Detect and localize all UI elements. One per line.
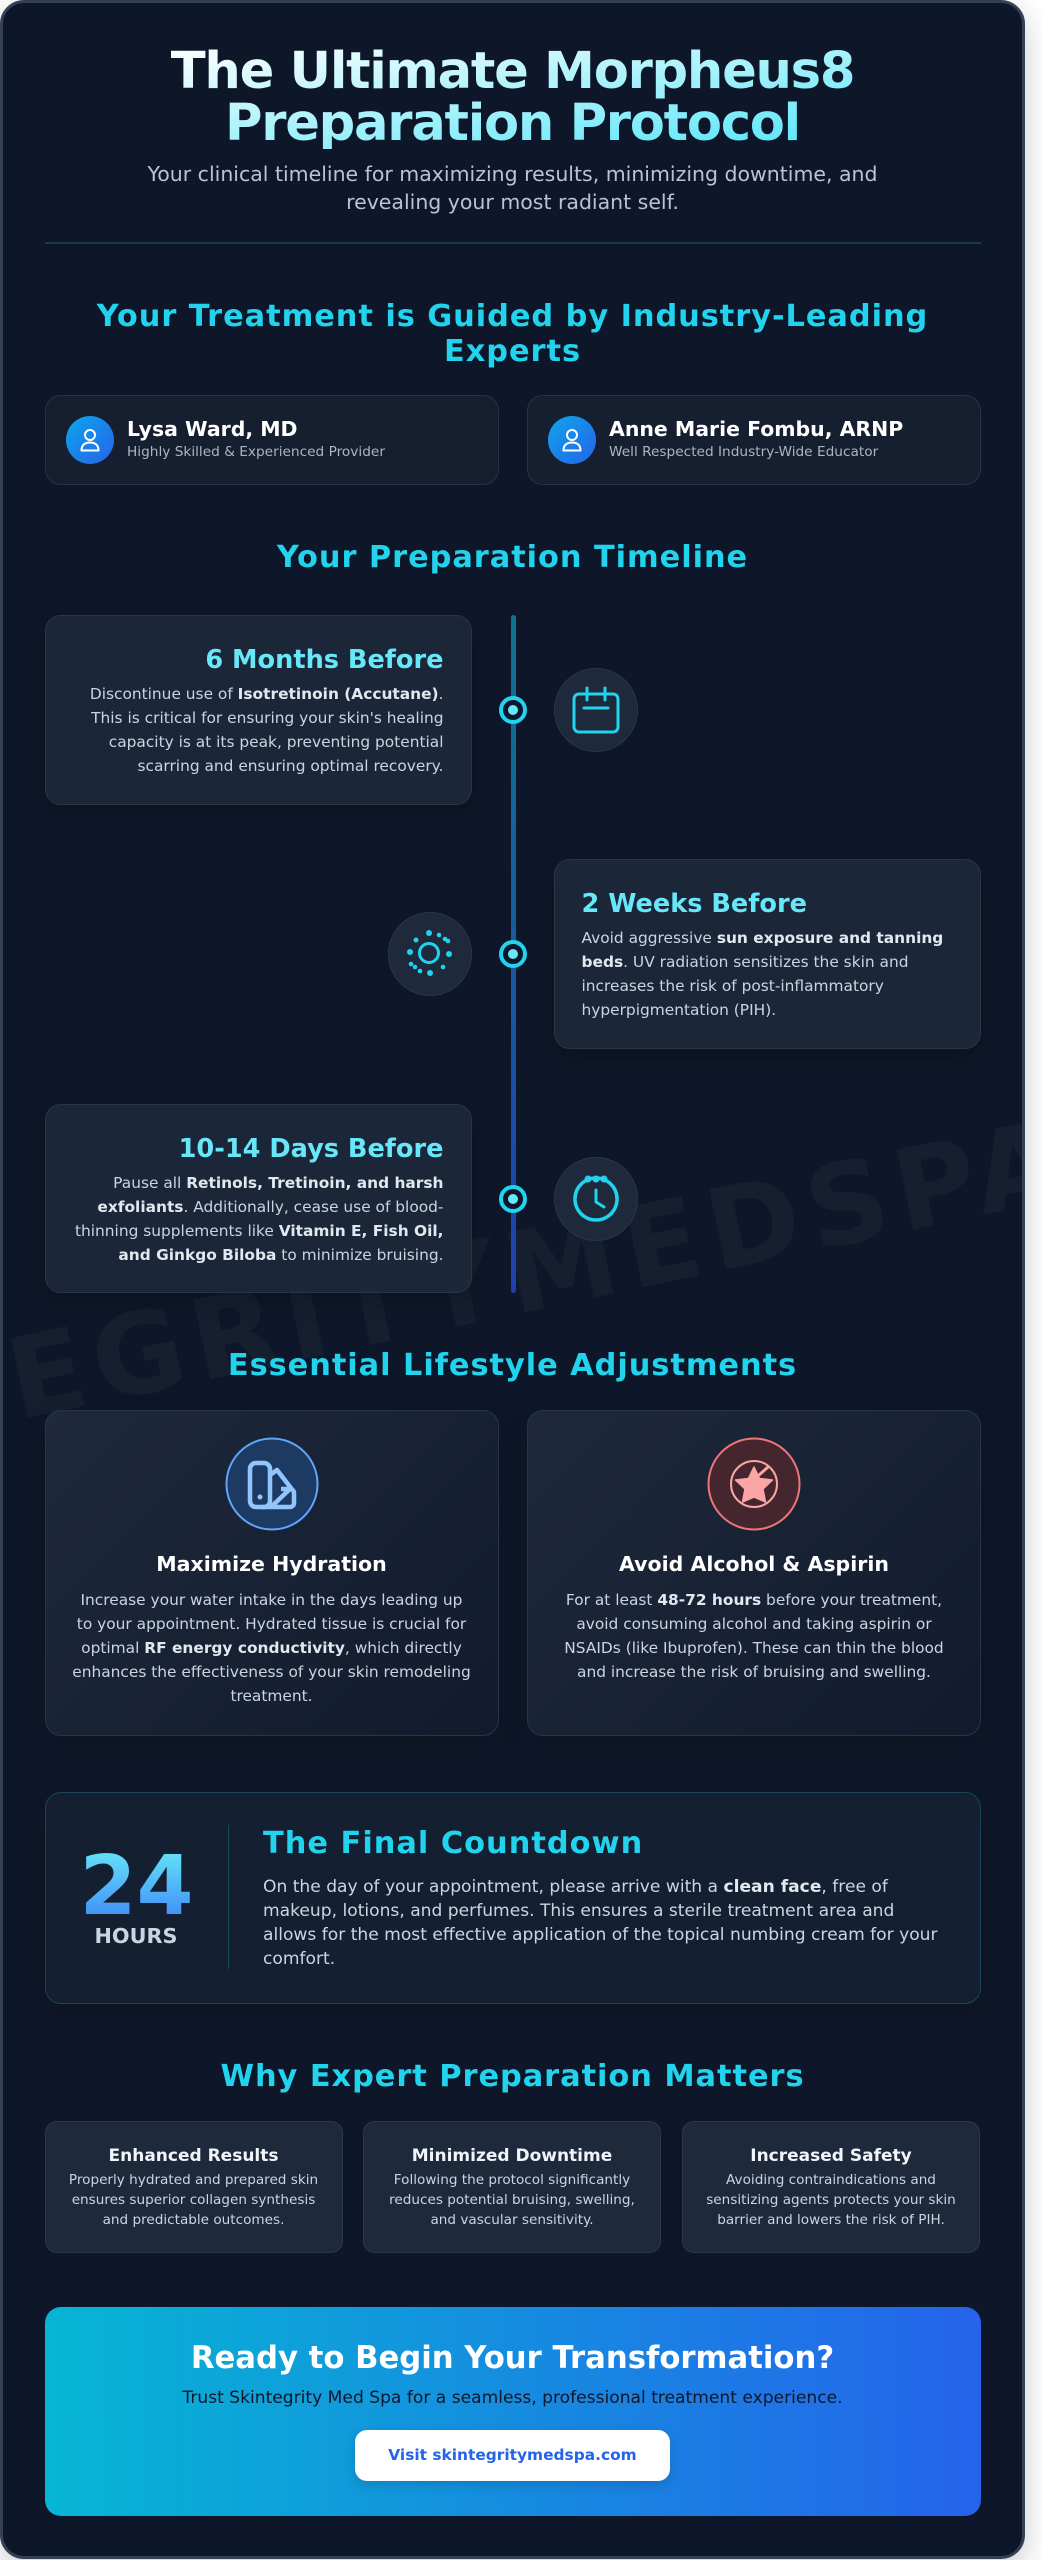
card text: and predictable outcomes. <box>103 2212 284 2228</box>
subtitle <box>147 162 878 214</box>
countdown title: The Final Countdown <box>263 1826 643 1861</box>
card text: exfoliants. Additionally, cease use of blood- <box>97 1198 444 1216</box>
card text: optimal RF energy conductivity, which directly <box>81 1639 462 1657</box>
icon: avatar <box>66 416 114 464</box>
timeline node <box>498 1185 526 1213</box>
card text: For at least 48-72 hours before your treatment, <box>566 1591 942 1609</box>
card text: Avoid aggressive sun exposure and tanning <box>582 928 943 946</box>
card text: hyperpigmentation (PIH). <box>582 1000 776 1018</box>
card title: 6 Months Before <box>205 644 444 674</box>
countdown text: allows for the most effective application of the topical numbing cream for your <box>263 1925 938 1945</box>
card text: and vascular sensitivity. <box>430 2212 594 2228</box>
expert credential: Highly Skilled & Experienced Provider <box>127 444 385 460</box>
title: Preparation Protocol <box>225 92 800 152</box>
card title: Increased Safety <box>750 2146 912 2166</box>
card text <box>90 684 444 774</box>
icon: calendar <box>554 668 638 752</box>
heading: experts <box>96 299 928 369</box>
card text: This is critical for ensuring your skin's healing <box>91 708 444 726</box>
card text <box>69 2172 318 2228</box>
card text: Avoiding contraindications and <box>726 2172 936 2188</box>
card text <box>72 1591 471 1705</box>
card title: Enhanced Results <box>108 2146 278 2166</box>
panel: call to action <box>44 2307 980 2516</box>
card text: barrier and lowers the risk of PIH. <box>717 2212 945 2228</box>
card text <box>564 1591 944 1681</box>
icon: swatch <box>226 1438 318 1530</box>
card text: beds. UV radiation sensitizes the skin and <box>582 952 908 970</box>
hours label: HOURS <box>94 1924 177 1948</box>
panel: alcohol and aspirin <box>527 1410 981 1736</box>
card title: 10-14 Days Before <box>179 1134 444 1164</box>
countdown text: comfort. <box>263 1949 335 1969</box>
timeline line <box>511 615 516 1293</box>
countdown text: makeup, lotions, and perfumes. This ensures a sterile treatment area and <box>263 1901 894 1921</box>
icon: no aspirin <box>708 1438 800 1530</box>
timeline card: 2 weeks <box>554 859 980 1049</box>
card text: reduces potential bruising, swelling, <box>389 2192 635 2208</box>
icon: sun <box>388 912 472 996</box>
card text: avoid consuming alcohol and taking aspirin or <box>576 1615 932 1633</box>
title <box>170 44 855 148</box>
panel: expert Anne Marie Fombu <box>527 395 981 485</box>
panel: increased safety <box>682 2120 980 2253</box>
card text <box>706 2172 956 2228</box>
panel: hydration <box>44 1410 498 1736</box>
countdown text <box>263 1877 938 1969</box>
card text: scarring and ensuring optimal recovery. <box>138 756 444 774</box>
card text: Properly hydrated and prepared skin <box>69 2172 318 2188</box>
card text: and increase the risk of bruising and swelling. <box>577 1663 931 1681</box>
panel: enhanced results <box>44 2120 342 2253</box>
card text: capacity is at its peak, preventing potential <box>109 732 444 750</box>
heading: experts: Experts <box>444 334 581 369</box>
cta button: Visit skintegritymedspa.com <box>388 2446 637 2464</box>
card text: Pause all Retinols, Tretinoin, and harsh <box>113 1174 444 1192</box>
card title: Avoid Alcohol & Aspirin <box>619 1552 889 1576</box>
cta button <box>355 2430 670 2481</box>
panel: final countdown <box>44 1792 980 2004</box>
card title: 2 Weeks Before <box>582 888 807 918</box>
cta title: Ready to Begin Your Transformation? <box>191 2341 834 2376</box>
card text: ensures superior collagen synthesis <box>72 2192 315 2208</box>
heading: lifestyle: Essential Lifestyle Adjustments <box>228 1348 797 1383</box>
icon: avatar <box>548 416 596 464</box>
card text: increases the risk of post-inflammatory <box>582 976 884 994</box>
countdown text: On the day of your appointment, please arrive with a clean face, free of <box>263 1877 888 1897</box>
title: The Ultimate Morpheus8 <box>171 40 854 100</box>
big number: 24 <box>80 1839 194 1934</box>
panel: minimized downtime <box>363 2120 661 2253</box>
timeline node <box>498 940 526 968</box>
panel: expert Lysa Ward <box>44 395 498 485</box>
subtitle: Your clinical timeline for maximizing results, minimizing downtime, and <box>147 162 878 186</box>
expert name: Lysa Ward, MD <box>127 417 298 441</box>
card text: to your appointment. Hydrated tissue is crucial for <box>77 1615 466 1633</box>
subtitle: revealing your most radiant self. <box>346 190 679 214</box>
card text: enhances the effectiveness of your skin remodeling <box>72 1663 471 1681</box>
card text: Following the protocol significantly <box>394 2172 630 2188</box>
card text: NSAIDs (like Ibuprofen). These can thin the blood <box>564 1639 944 1657</box>
card text: thinning supplements like Vitamin E, Fish Oil, <box>75 1222 444 1240</box>
card text: Increase your water intake in the days leading up <box>81 1591 462 1609</box>
heading: why: Why Expert Preparation Matters <box>220 2059 805 2094</box>
card title: Maximize Hydration <box>156 1552 387 1576</box>
card text <box>75 1174 444 1264</box>
timeline card: 6 months <box>44 615 472 805</box>
icon: stopwatch <box>554 1157 638 1241</box>
card text <box>582 928 943 1018</box>
card title: Minimized Downtime <box>412 2146 612 2166</box>
card text <box>389 2172 635 2228</box>
card text: and Ginkgo Biloba to minimize bruising. <box>118 1246 444 1264</box>
card text: Discontinue use of Isotretinoin (Accutane). <box>90 684 444 702</box>
heading: experts: Your Treatment is Guided by Industry-Leading <box>97 299 928 334</box>
heading: timeline: Your Preparation Timeline <box>277 540 748 575</box>
cta text: Trust Skintegrity Med Spa for a seamless, professional treatment experience. <box>182 2388 843 2408</box>
timeline node <box>498 696 526 724</box>
expert name: Anne Marie Fombu, ARNP <box>609 417 903 441</box>
expert credential: Well Respected Industry-Wide Educator <box>609 444 878 460</box>
card text: treatment. <box>230 1687 313 1705</box>
card text: sensitizing agents protects your skin <box>706 2192 956 2208</box>
timeline card: 10-14 days <box>44 1104 472 1293</box>
